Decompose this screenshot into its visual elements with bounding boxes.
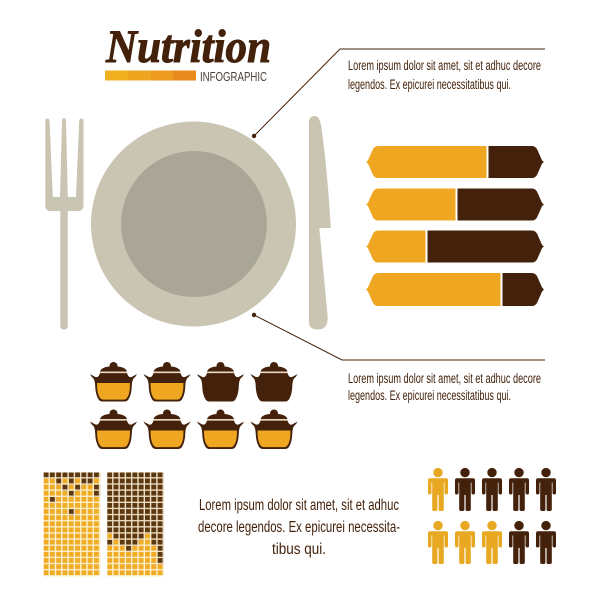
center text block: Lorem ipsum dolor sit amet, sit et adhuc: [199, 497, 399, 514]
square grid chart: left: [44, 472, 100, 576]
center text block: tibus qui.: [272, 541, 326, 558]
callout text: top: legendos. Ex epicurei necessitatibus qui.: [348, 77, 511, 92]
center text block: decore legendos. Ex epicurei necessita-: [198, 519, 400, 536]
subtitle: INFOGRAPHIC: [200, 69, 267, 84]
people pictogram: [428, 468, 556, 564]
icon: fork: [45, 118, 84, 330]
pot pictogram: [90, 362, 298, 449]
bar 1: [366, 146, 544, 178]
bar 3: [366, 230, 544, 262]
callout text: bottom: [348, 371, 541, 403]
center text block: [198, 497, 400, 558]
callout line: top: [252, 49, 545, 138]
bar chart: [366, 146, 544, 306]
square grid chart: right: [107, 472, 164, 576]
callout line: bottom: [252, 313, 545, 360]
icon: knife: [309, 116, 331, 330]
bar 4: [366, 273, 544, 306]
icon: plate: [91, 122, 296, 326]
title: Nutrition: [105, 21, 271, 73]
title colour bar: [105, 70, 196, 80]
bar 2: [366, 188, 544, 220]
callout text: bottom: legendos. Ex epicurei necessitatibus qui.: [348, 388, 511, 403]
callout text: top: [348, 58, 541, 92]
